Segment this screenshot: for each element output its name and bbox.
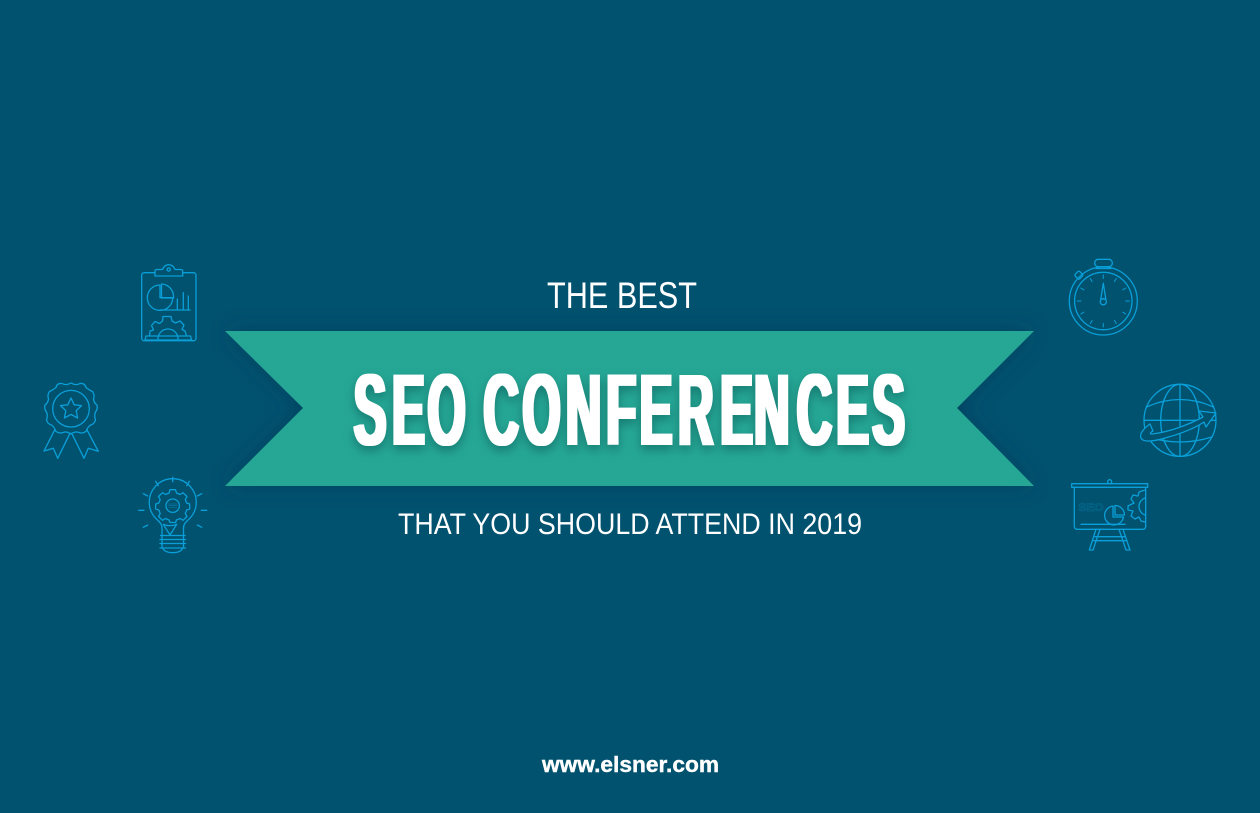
icon: presentation board [1072, 480, 1148, 550]
icon: globe with arrow [1141, 384, 1216, 456]
subheading: that you should attend in 2019: THAT YOU SHOULD ATTEND IN 2019 [398, 508, 862, 541]
icon: award badge [44, 383, 98, 458]
icon: stopwatch [1069, 259, 1137, 335]
heading: the best: THE BEST [547, 275, 697, 316]
icon: presentation board: SEO [1078, 502, 1104, 514]
title: seo conferences: SEO CONFERENCES [354, 353, 905, 467]
icon: light bulb with gear [139, 477, 207, 553]
icon: clipboard report [142, 265, 196, 341]
ribbon banner [225, 331, 1034, 486]
website url: www.elsner.com [541, 752, 719, 777]
